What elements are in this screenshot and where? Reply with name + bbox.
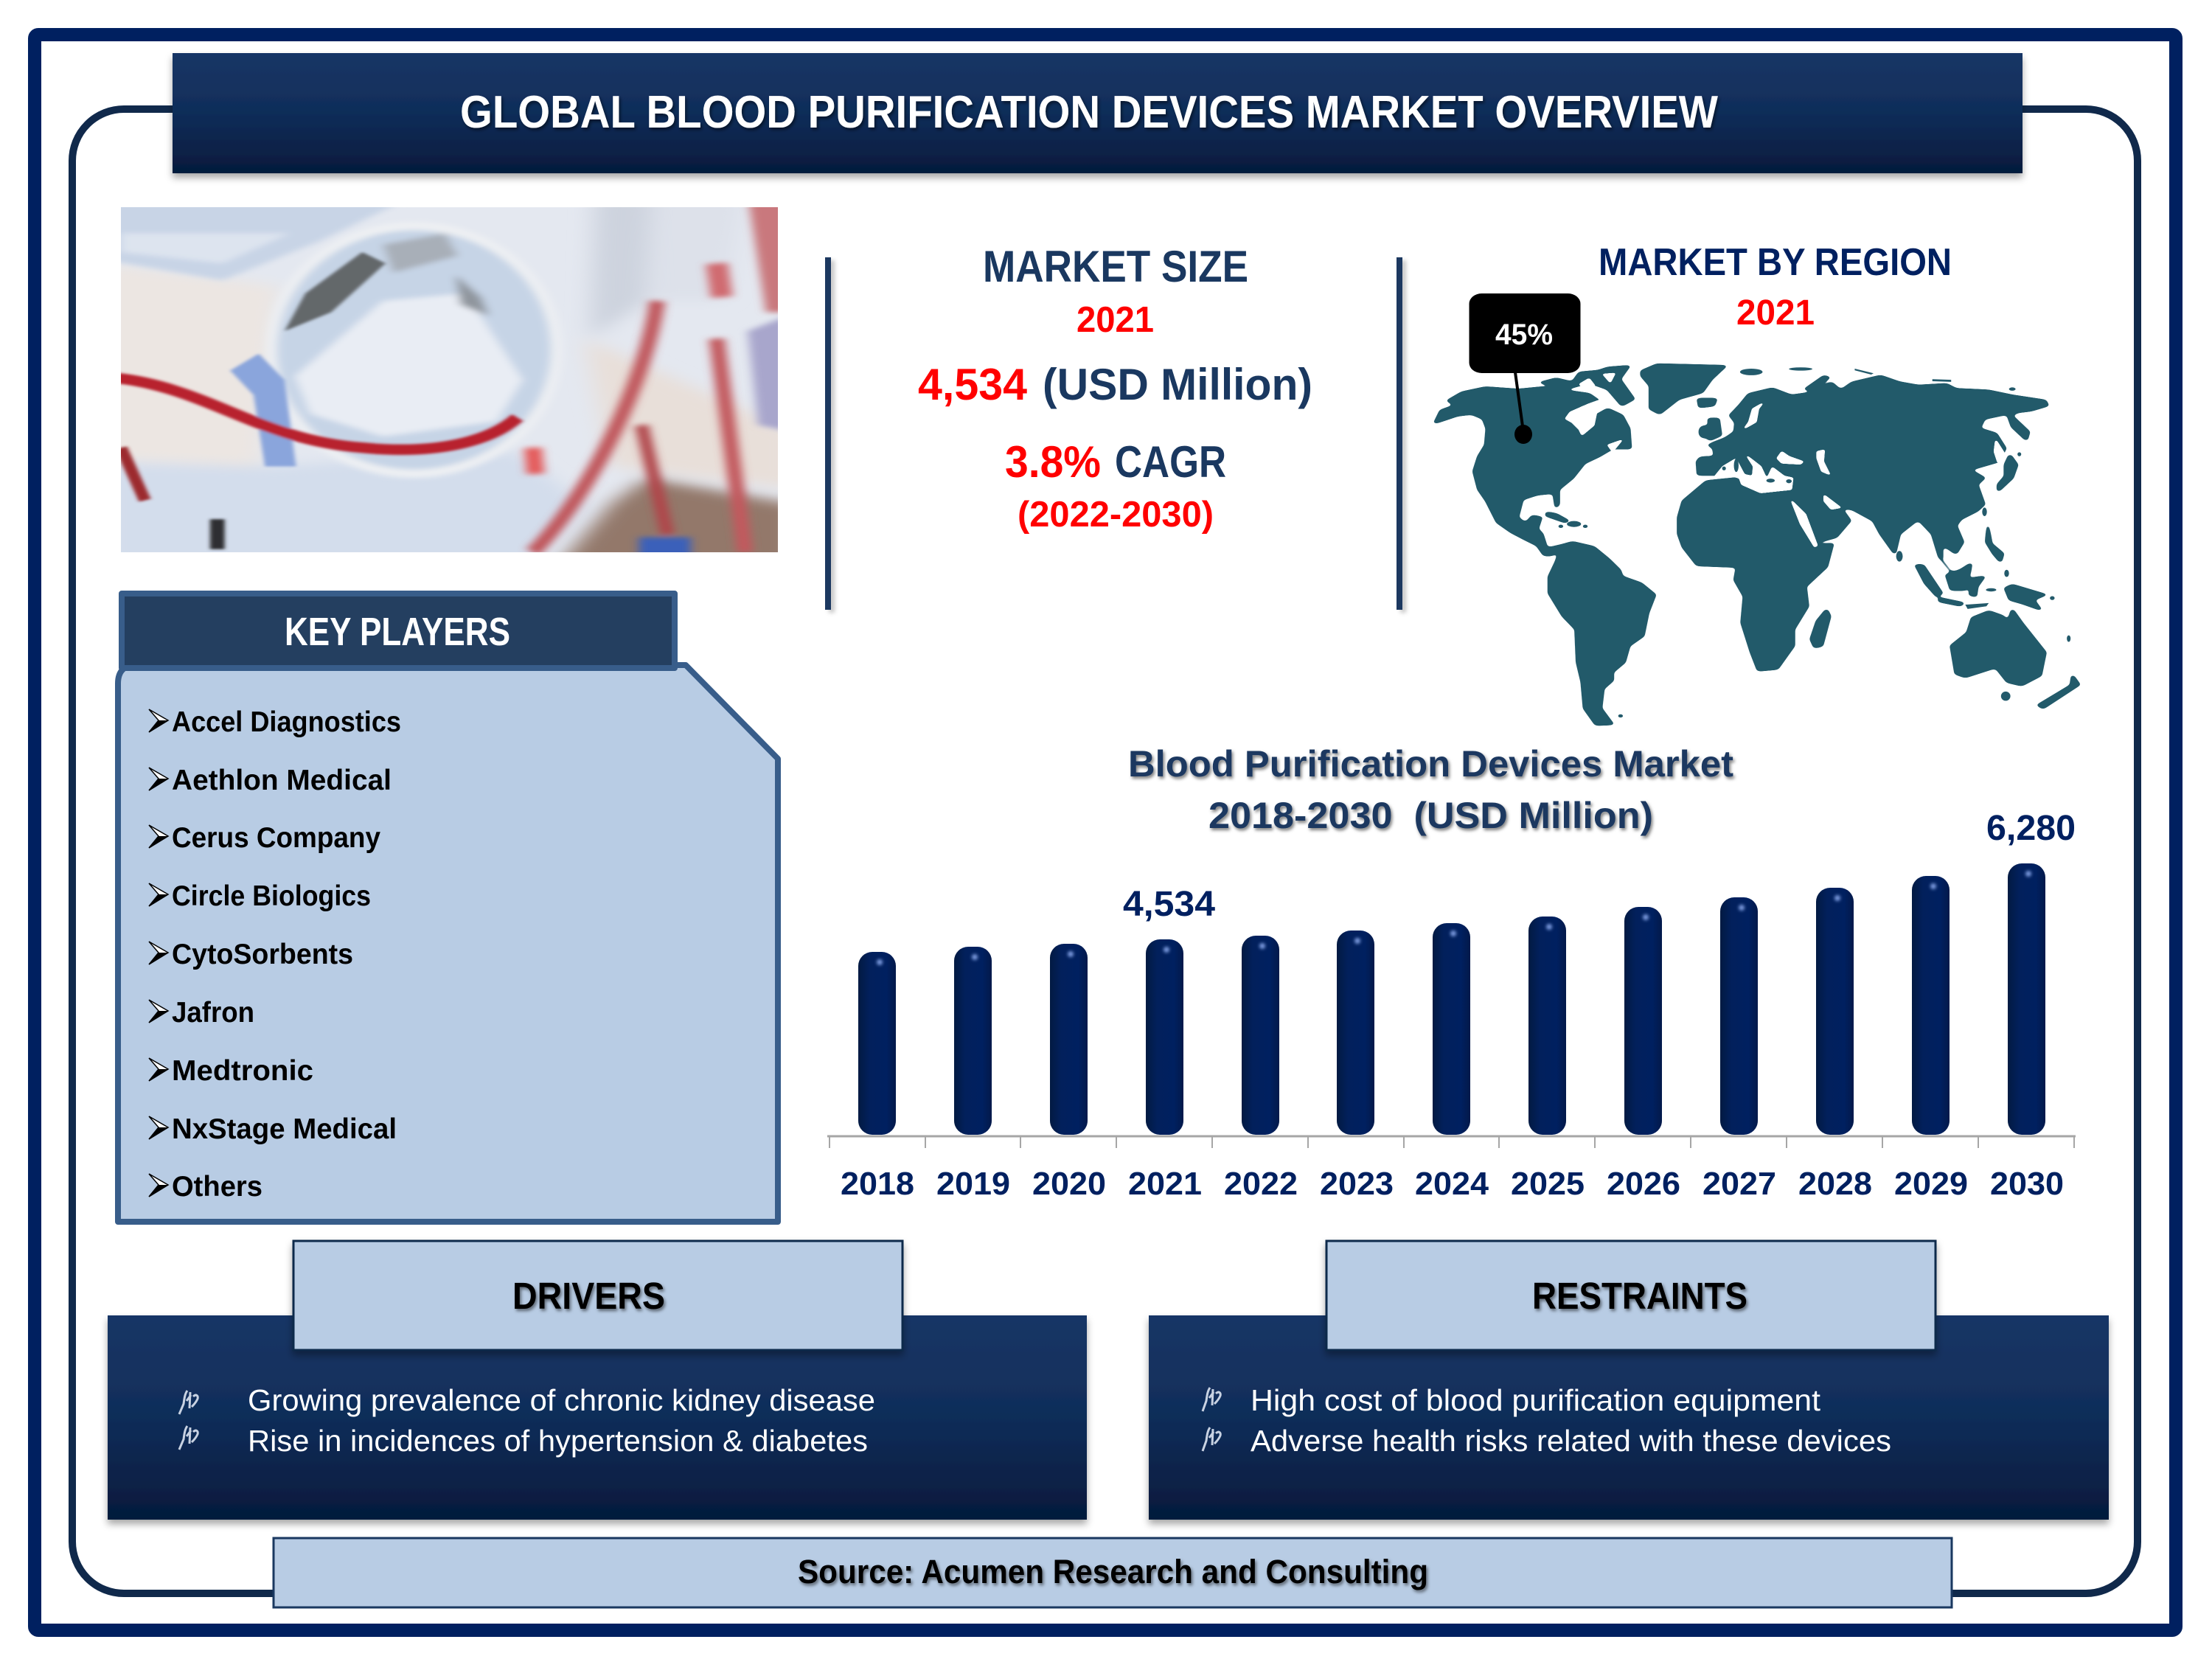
callout: 45% North America	[1469, 293, 1581, 444]
bars	[858, 863, 2045, 1135]
restraints header: RESTRAINTS	[1532, 1275, 1747, 1317]
value label 2030: 6,280	[1986, 809, 2076, 848]
driver text 2: Rise in incidences of hypertension & diabetes	[248, 1424, 868, 1458]
bullet icon	[1203, 1427, 1220, 1451]
source box	[274, 1538, 1952, 1607]
item: Medtronic: Medtronic	[172, 1055, 313, 1087]
year labels	[841, 1166, 2064, 1202]
bullet icon	[179, 1426, 198, 1450]
heading: market size: MARKET SIZE	[983, 242, 1248, 291]
drivers body	[108, 1315, 1087, 1520]
key players list	[149, 706, 401, 1203]
value label 2021: 4,534	[1123, 885, 1215, 924]
year labels: 2018	[841, 1166, 914, 1202]
year labels: 2020	[1032, 1166, 1106, 1202]
source box: Source: Acumen Research and Consulting	[798, 1553, 1428, 1590]
title banner	[173, 53, 2023, 173]
chart title: 2018-2030 (USD Million)	[1208, 795, 1653, 836]
heading: market by region: MARKET BY REGION	[1599, 241, 1952, 284]
restraints body	[1149, 1315, 2109, 1520]
bar chart: market 2018-2030	[827, 743, 2076, 1202]
item: Cerus Company: Cerus Company	[172, 822, 380, 854]
year labels: 2027	[1703, 1166, 1776, 1202]
item: Aethlon Medical: Aethlon Medical	[172, 765, 392, 796]
item: Jafron: Jafron	[172, 997, 254, 1029]
bullet icon	[179, 1391, 198, 1414]
driver text 1: Growing prevalence of chronic kidney disease	[248, 1383, 875, 1417]
item: Accel Diagnostics: Accel Diagnostics	[172, 706, 401, 738]
divider: left vertical bar	[825, 257, 831, 610]
year labels: 2023	[1320, 1166, 1394, 1202]
year labels: 2026	[1607, 1166, 1680, 1202]
market size value: (USD Million)	[1043, 360, 1312, 409]
title: GLOBAL BLOOD PURIFICATION DEVICES MARKET OVERVIEW	[460, 87, 1718, 138]
item: Circle Biologics: Circle Biologics	[172, 880, 371, 912]
item: NxStage Medical: NxStage Medical	[172, 1113, 397, 1145]
chart title: Blood Purification Devices Market	[1128, 743, 1733, 785]
item: CytoSorbents: CytoSorbents	[172, 939, 353, 970]
year labels: 2029	[1894, 1166, 1968, 1202]
divider: right vertical bar	[1397, 257, 1402, 610]
CAGR value: 3.8%	[1005, 437, 1101, 487]
panel: key players	[118, 594, 778, 1222]
restraint text 2: Adverse health risks related with these devices	[1251, 1424, 1891, 1458]
year labels: 2028	[1798, 1166, 1872, 1202]
panel: drivers	[108, 1241, 1087, 1520]
year labels: 2030	[1990, 1166, 2064, 1202]
chart title	[1128, 743, 1733, 836]
drivers header	[293, 1241, 902, 1350]
CAGR value	[1005, 437, 1226, 487]
bullet icon	[1203, 1388, 1220, 1411]
panel: market by region	[1435, 241, 2079, 725]
key players list body	[118, 665, 778, 1222]
key players header	[122, 594, 675, 668]
restraint text 1: High cost of blood purification equipment	[1251, 1383, 1821, 1417]
axis	[827, 1136, 2076, 1148]
year labels: 2025	[1511, 1166, 1585, 1202]
photo: dialysis machine	[121, 207, 778, 552]
world map	[1435, 364, 2079, 725]
market size year: 2021	[1077, 300, 1154, 340]
year labels: 2021	[1128, 1166, 1202, 1202]
drivers header: DRIVERS	[512, 1275, 665, 1317]
item: Others: Others	[172, 1171, 262, 1203]
market by region year: 2021	[1736, 293, 1815, 333]
year labels: 2019	[936, 1166, 1010, 1202]
callout: 45% North America: 45%	[1495, 319, 1553, 351]
bar highlights	[877, 871, 2031, 965]
key players header: KEY PLAYERS	[285, 610, 510, 654]
year labels: 2024	[1415, 1166, 1489, 1202]
year labels: 2022	[1224, 1166, 1298, 1202]
panel: restraints	[1149, 1241, 2109, 1520]
CAGR value: CAGR	[1115, 437, 1226, 487]
restraints header	[1326, 1241, 1935, 1350]
panel: market size	[918, 242, 1312, 535]
CAGR period: (2022-2030)	[1018, 495, 1214, 535]
market size value: 4,534	[918, 360, 1028, 409]
market size value	[918, 360, 1312, 409]
